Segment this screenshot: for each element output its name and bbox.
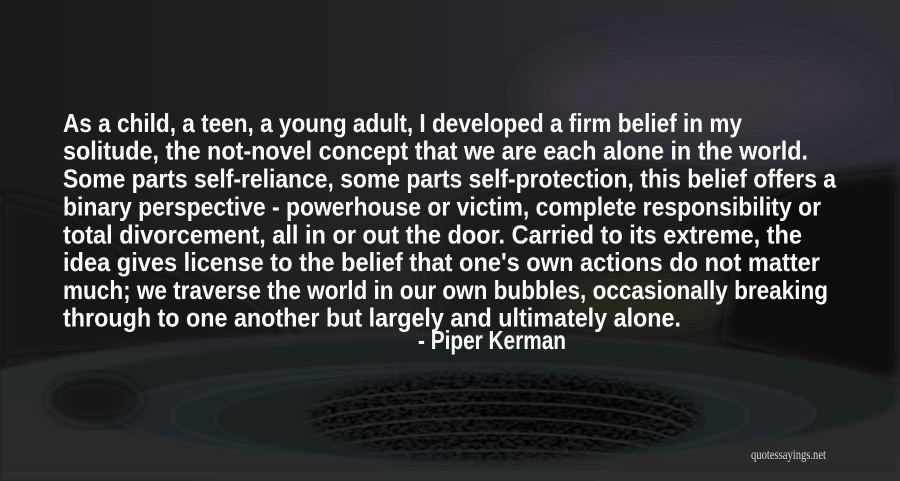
olive foreground glow: [550, 272, 730, 328]
pit deepest shade: [479, 388, 641, 428]
dark vignette left of rim: [50, 378, 140, 422]
quote text: As a child, a teen, a young adult, I developed a firm belief in my: [63, 108, 742, 138]
left hill: [0, 195, 300, 360]
ground: [0, 332, 900, 481]
quote text: [63, 108, 836, 332]
quote text: total divorcement, all in or out the door. Carried to its extreme, the: [63, 220, 802, 250]
watermark: quotessayings.net: [751, 447, 826, 462]
author attribution: - Piper Kerman: [418, 325, 566, 355]
right hill: [430, 163, 900, 370]
quote text: through to one another but largely and ultimately alone.: [63, 302, 681, 332]
pit speckle texture: [310, 370, 700, 462]
quote text: idea gives license to the belief that one's own actions do not matter: [63, 247, 820, 277]
quote text: solitude, the not-novel concept that we are each alone in the world.: [63, 136, 808, 166]
pit floor: [457, 374, 696, 424]
pit outer rim: [51, 339, 899, 455]
right dark slope: [720, 170, 900, 385]
pit terraces: [309, 388, 696, 455]
quote text: binary perspective - powerhouse or victim, complete responsibility or: [63, 192, 821, 222]
sky glow: [530, 50, 870, 140]
pit ring 3: [172, 370, 748, 462]
pit ring 4: [215, 376, 695, 462]
pit ring 2: [115, 364, 815, 462]
dark pit centre: [308, 368, 703, 464]
